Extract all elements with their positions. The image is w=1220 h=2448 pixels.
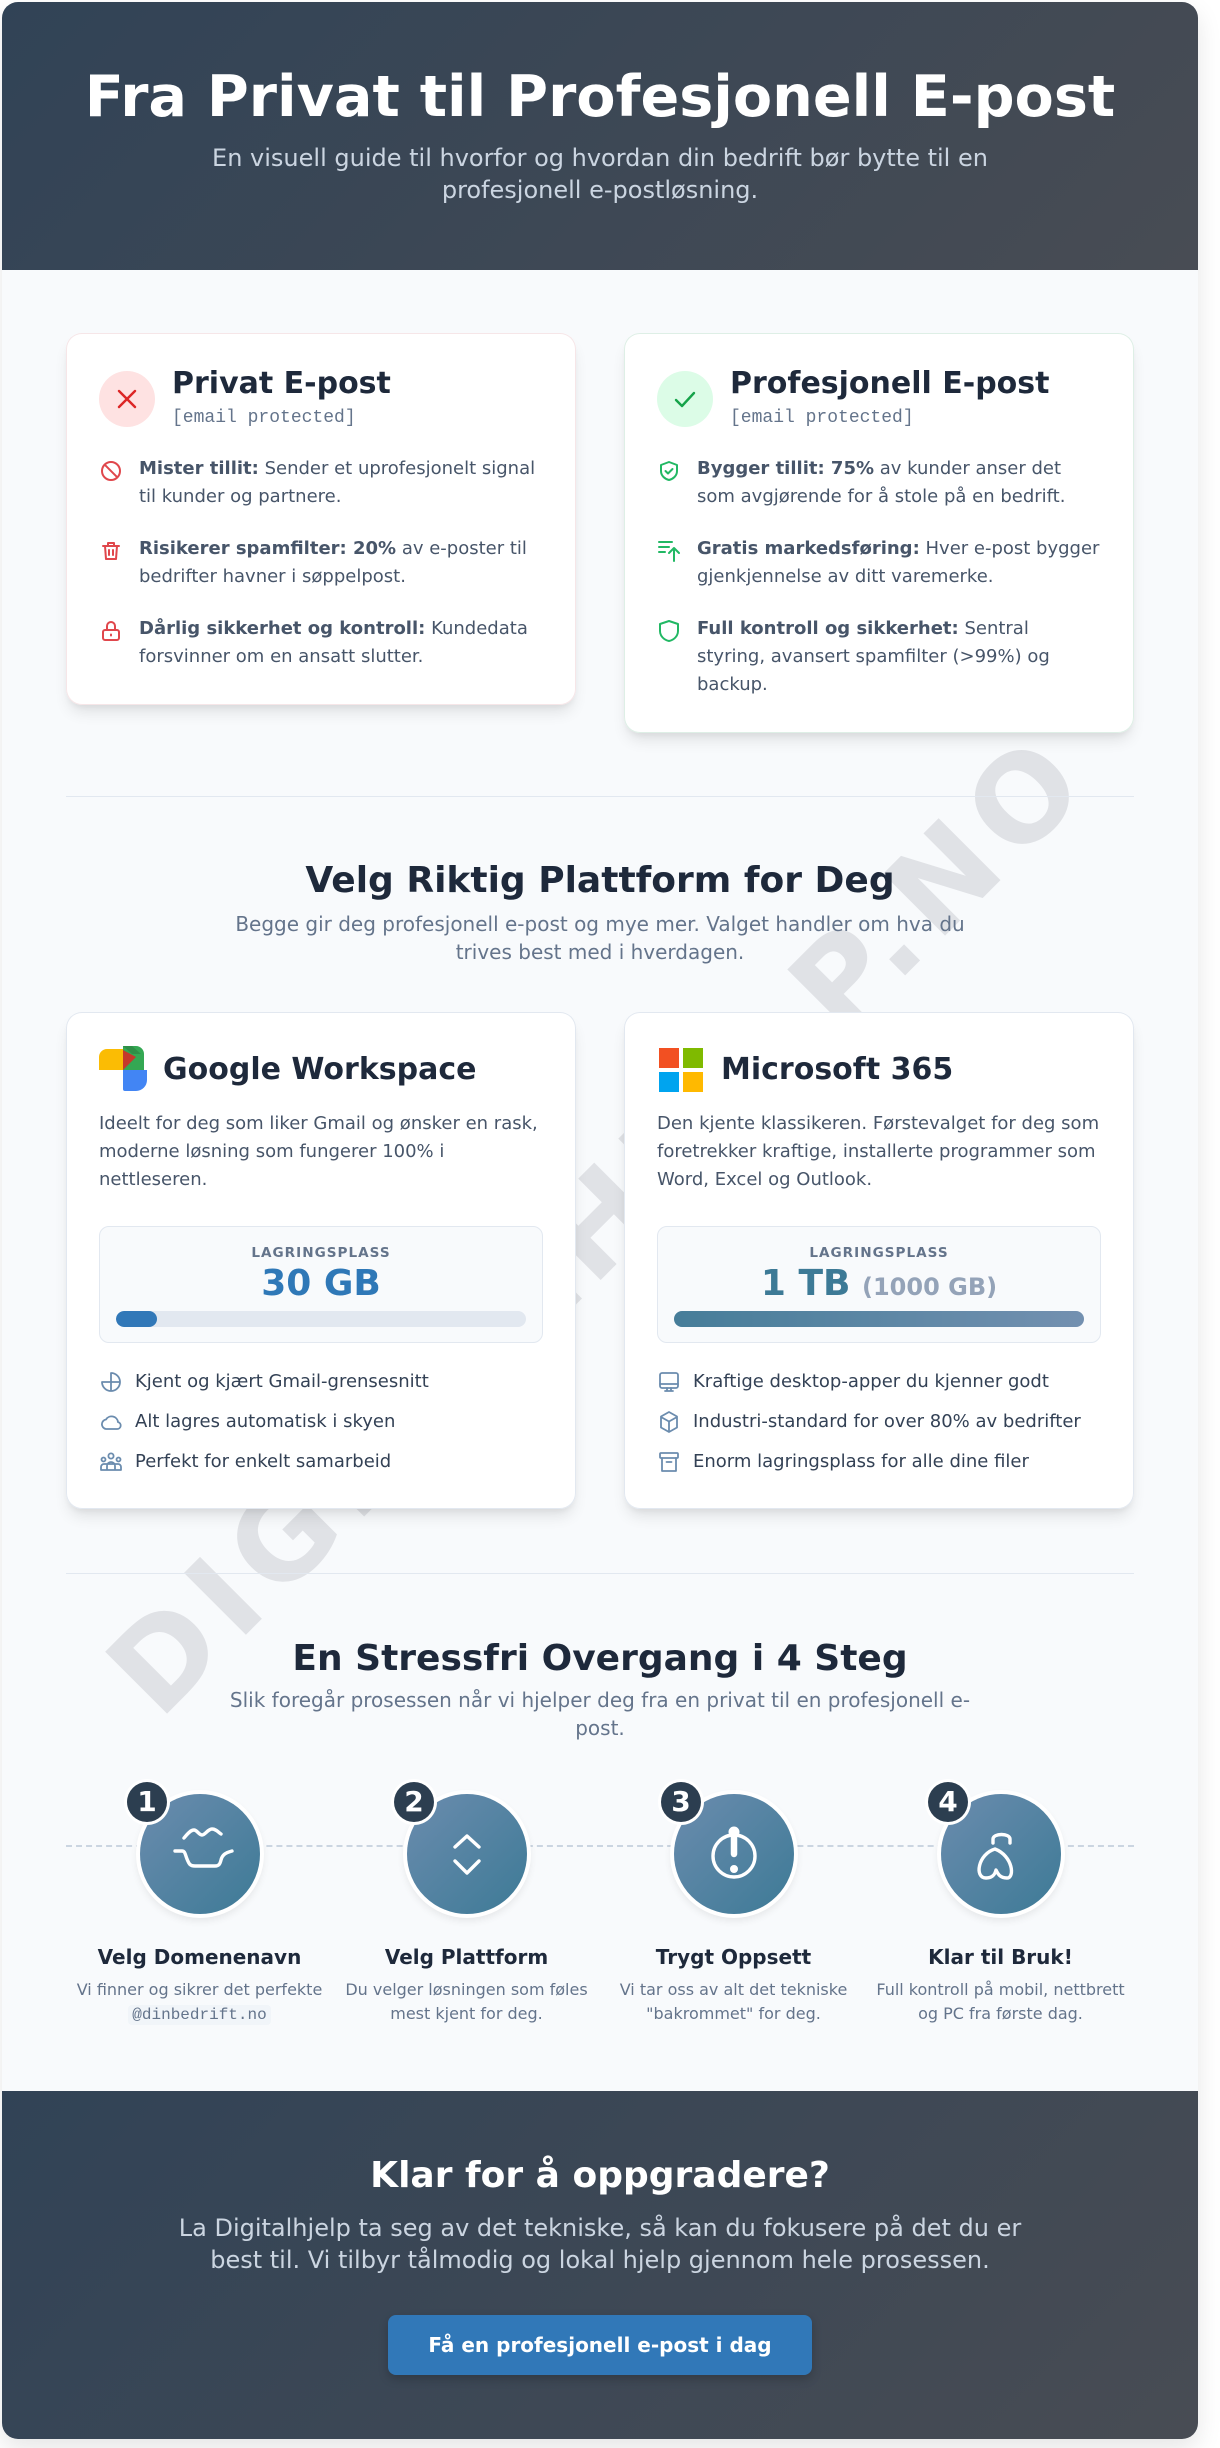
step text: "bakrommet" for deg. bbox=[646, 2004, 821, 2023]
icon: shield check bbox=[660, 461, 678, 481]
step title: Trygt Oppsett bbox=[656, 1945, 811, 1969]
text: best til. Vi tilbyr tålmodig og lokal hjelp gjennom hele prosessen. bbox=[210, 2246, 990, 2274]
feature: Enorm lagringsplass for alle dine filer bbox=[693, 1451, 1029, 1472]
badge bbox=[394, 1782, 434, 1822]
icon: ban bbox=[101, 461, 121, 481]
point: markedsføring bbox=[697, 538, 1100, 587]
description: nettleseren. bbox=[99, 1169, 207, 1190]
point: spamfilter: Risikerer spamfilter: 20% av e-poster til bbox=[139, 538, 527, 559]
heading: Privat E-post bbox=[172, 366, 391, 401]
text: platform intro: trives best med i hverdagen. bbox=[456, 940, 744, 964]
point: kontroll: backup. bbox=[697, 674, 768, 695]
badge bbox=[928, 1782, 968, 1822]
storage label: LAGRINGSPLASS bbox=[251, 1245, 391, 1261]
icon: desktop bbox=[659, 1372, 679, 1392]
point: tillit: Bygger tillit: 75% av kunder anser det bbox=[697, 458, 1061, 479]
panel: privat e-post bbox=[66, 333, 576, 705]
heading: Microsoft 365 bbox=[721, 1052, 953, 1087]
badge: 3 bbox=[671, 1785, 691, 1818]
icon: microsoft logo bbox=[659, 1048, 703, 1092]
feature: Perfekt for enkelt samarbeid bbox=[135, 1451, 391, 1472]
text: La Digitalhjelp ta seg av det tekniske, så kan du fokusere på det du er bbox=[179, 2214, 1021, 2242]
step title: Velg Plattform bbox=[385, 1945, 548, 1969]
point: tillit bbox=[139, 458, 535, 507]
step text: Vi finner og sikrer det perfekte bbox=[77, 1980, 322, 1999]
panel: microsoft 365 bbox=[624, 1012, 1134, 1509]
step text: og PC fra første dag. bbox=[918, 2004, 1083, 2023]
icon: unlocked bbox=[940, 1794, 1060, 1914]
point: tillit: som avgjørende for å stole på en bedrift. bbox=[697, 486, 1065, 507]
badge: 4 bbox=[938, 1785, 958, 1818]
storage bar bbox=[674, 1311, 1084, 1327]
icon: pie bbox=[101, 1372, 121, 1392]
point: markedsføring: gjenkjennelse av ditt varemerke. bbox=[697, 566, 994, 587]
heading: Profesjonell E-post bbox=[730, 366, 1049, 401]
badge: 1 bbox=[137, 1785, 157, 1818]
step text bbox=[76, 1980, 322, 2024]
icon: archive bbox=[659, 1452, 679, 1472]
heading: platform: Velg Riktig Plattform for Deg bbox=[305, 860, 895, 901]
storage value: 1 TB (1000 GB) bbox=[761, 1263, 997, 1304]
step text bbox=[345, 1980, 588, 2023]
icon: cloud bbox=[101, 1416, 122, 1430]
step text: Vi tar oss av alt det tekniske bbox=[620, 1980, 847, 1999]
point: kontroll: styring, avansert spamfilter (>99%) og bbox=[697, 646, 1050, 667]
storage bar bbox=[116, 1311, 526, 1327]
button: Få en profesjonell e-post i dag bbox=[428, 2333, 772, 2357]
badge: 2 bbox=[404, 1785, 424, 1818]
subtitle bbox=[212, 144, 988, 204]
point: tillit bbox=[697, 458, 1065, 507]
title: Fra Privat til Profesjonell E-post bbox=[85, 64, 1115, 130]
point: spamfilter: bedrifter havner i søppelpost. bbox=[139, 566, 406, 587]
address: [email protected] bbox=[730, 408, 914, 428]
panel: call to action bbox=[2, 2091, 1198, 2439]
icon: green check bbox=[657, 371, 713, 427]
description bbox=[657, 1113, 1099, 1190]
step title: Velg Domenenavn bbox=[98, 1945, 301, 1969]
description bbox=[99, 1113, 538, 1190]
step text: mest kjent for deg. bbox=[390, 2004, 543, 2023]
storage box bbox=[657, 1226, 1101, 1343]
feature: Industri-standard for over 80% av bedrifter bbox=[693, 1411, 1081, 1432]
point: spamfilter bbox=[139, 538, 527, 587]
step 4 bbox=[876, 1782, 1125, 2023]
button bbox=[388, 2315, 812, 2375]
step title: Klar til Bruk! bbox=[928, 1945, 1073, 1969]
text: steps intro: Slik foregår prosessen når vi hjelper deg fra en privat til en profesjonell e- bbox=[230, 1688, 970, 1712]
icon: people bbox=[100, 1452, 122, 1471]
icon: google logo bbox=[99, 1046, 147, 1091]
text: steps intro bbox=[230, 1688, 970, 1740]
text: steps intro: post. bbox=[575, 1716, 625, 1740]
description: Ideelt for deg som liker Gmail og ønsker en rask, bbox=[99, 1113, 538, 1134]
step text: Du velger løsningen som føles bbox=[345, 1980, 588, 1999]
text: platform intro: Begge gir deg profesjonell e-post og mye mer. Valget handler om hva du bbox=[235, 912, 965, 936]
icon: chevrons bbox=[406, 1794, 526, 1914]
icon: alert bbox=[674, 1794, 794, 1914]
panel: google workspace bbox=[66, 1012, 576, 1509]
panel: header bbox=[2, 2, 1198, 270]
icon: trending list bbox=[658, 541, 680, 562]
point: markedsføring: Gratis markedsføring: Hver e-post bygger bbox=[697, 538, 1099, 559]
feature: Alt lagres automatisk i skyen bbox=[135, 1411, 395, 1432]
step text bbox=[620, 1980, 847, 2023]
point: sikkerhet: Dårlig sikkerhet og kontroll: Kundedata bbox=[139, 618, 528, 639]
description: foretrekker kraftige, installerte programmer som bbox=[657, 1141, 1096, 1162]
icon: trash bbox=[102, 542, 120, 560]
step 2 bbox=[345, 1782, 588, 2023]
description: moderne løsning som fungerer 100% i bbox=[99, 1141, 444, 1162]
subtitle: En visuell guide til hvorfor og hvordan din bedrift bør bytte til en bbox=[212, 144, 988, 172]
point: sikkerhet: forsvinner om en ansatt slutter. bbox=[139, 646, 423, 667]
step 3 bbox=[620, 1782, 847, 2023]
point: kontroll bbox=[697, 618, 1050, 695]
icon: lock bbox=[102, 621, 120, 641]
text: platform intro bbox=[235, 912, 965, 964]
icon: red cross bbox=[99, 371, 155, 427]
step text bbox=[876, 1980, 1125, 2023]
heading: steps: En Stressfri Overgang i 4 Steg bbox=[292, 1638, 908, 1679]
badge bbox=[661, 1782, 701, 1822]
storage label: LAGRINGSPLASS bbox=[809, 1245, 949, 1261]
feature: Kraftige desktop-apper du kjenner godt bbox=[693, 1371, 1049, 1392]
storage value: 30 GB bbox=[261, 1263, 381, 1304]
description: Word, Excel og Outlook. bbox=[657, 1169, 872, 1190]
subtitle: profesjonell e-postløsning. bbox=[442, 176, 758, 204]
feature: Kjent og kjært Gmail-grensesnitt bbox=[135, 1371, 429, 1392]
icon: shield bbox=[659, 620, 679, 642]
point: sikkerhet bbox=[139, 618, 528, 667]
heading: Klar for å oppgradere? bbox=[370, 2155, 830, 2196]
address: [email protected] bbox=[172, 408, 356, 428]
text: DIGITALHJELP.NO bbox=[81, 705, 1118, 1742]
step text: Full kontroll på mobil, nettbrett bbox=[876, 1980, 1125, 1999]
step 1 bbox=[76, 1782, 322, 2024]
panel: profesjonell e-post bbox=[624, 333, 1134, 733]
icon: cube bbox=[660, 1411, 678, 1433]
point: tillit: Mister tillit: Sender et uprofesjonelt signal bbox=[139, 458, 535, 479]
point: tillit: til kunder og partnere. bbox=[139, 486, 341, 507]
point: kontroll: Full kontroll og sikkerhet: Sentral bbox=[697, 618, 1029, 639]
text bbox=[179, 2214, 1022, 2274]
storage box bbox=[99, 1226, 543, 1343]
badge bbox=[127, 1782, 167, 1822]
description: Den kjente klassikeren. Førstevalget for deg som bbox=[657, 1113, 1099, 1134]
step text: @dinbedrift.no bbox=[132, 2006, 267, 2024]
heading: Google Workspace bbox=[163, 1052, 476, 1087]
icon: domain bbox=[140, 1794, 260, 1914]
